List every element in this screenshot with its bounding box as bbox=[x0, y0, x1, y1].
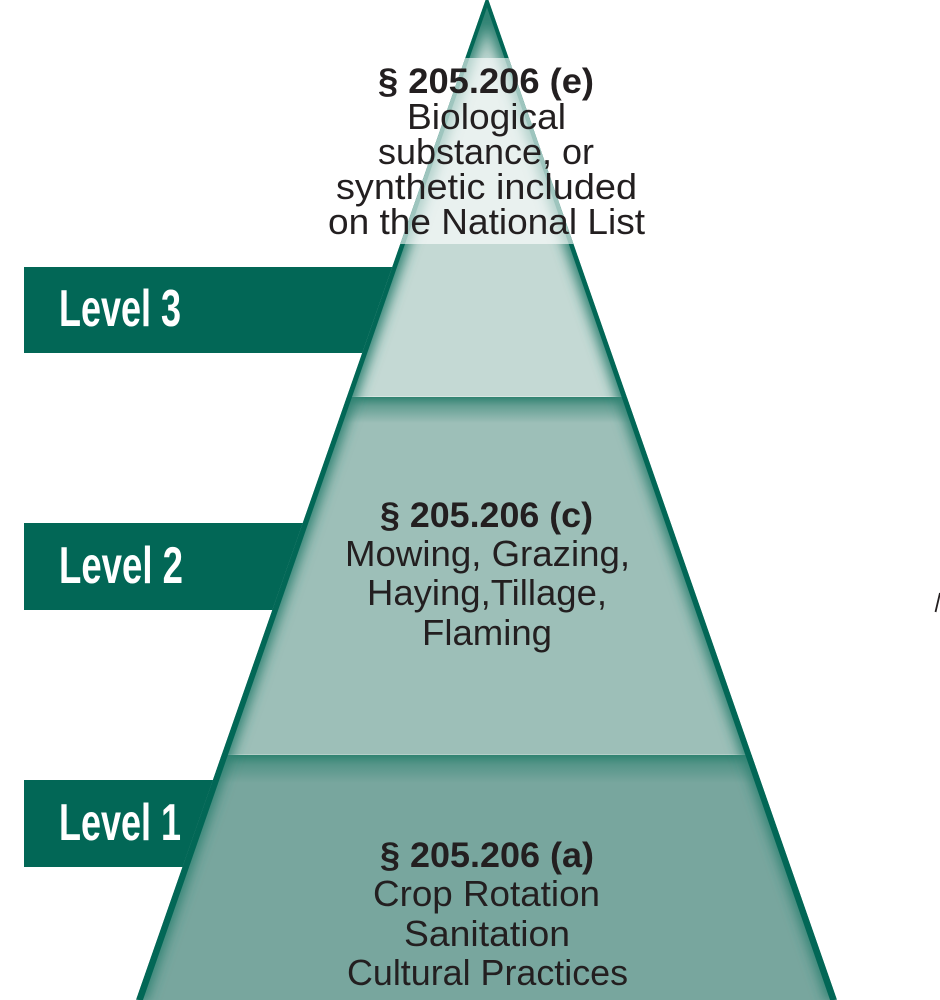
text: level 1 regulation bbox=[347, 836, 628, 993]
cropped slash mark at right edge bbox=[936, 593, 940, 612]
level 1 tab bbox=[24, 780, 222, 867]
text: level 3 regulation: synthetic included bbox=[336, 166, 637, 207]
pyramid bbox=[130, 0, 850, 1000]
text: level 3 regulation: substance, or bbox=[378, 131, 594, 172]
text: level 3 regulation: Biological bbox=[407, 96, 566, 137]
level 3 tab bbox=[24, 267, 400, 353]
level 2 tab bbox=[24, 523, 310, 610]
text: level 1 regulation: Cultural Practices bbox=[347, 952, 628, 993]
pyramid tier: level 1 bbox=[130, 755, 850, 1000]
text: level 3 regulation bbox=[328, 62, 645, 242]
label: Level 1: Level 1 bbox=[59, 794, 181, 852]
label: Level 3: Level 3 bbox=[59, 280, 181, 338]
text: level 3 regulation: § 205.206 (e) bbox=[378, 62, 594, 101]
text: level 2 regulation: Flaming bbox=[422, 612, 552, 653]
pyramid tier: level 3 bbox=[348, 28, 626, 396]
text: level 1 regulation: § 205.206 (a) bbox=[380, 836, 594, 875]
text: level 3 regulation: on the National List bbox=[328, 201, 645, 242]
text: level 2 regulation: Haying,Tillage, bbox=[367, 572, 607, 613]
text: level 2 regulation bbox=[345, 496, 630, 653]
text: level 1 regulation: Sanitation bbox=[404, 913, 570, 954]
text: level 2 regulation: Mowing, Grazing, bbox=[345, 533, 630, 574]
text: level 1 regulation: Crop Rotation bbox=[373, 873, 600, 914]
text: level 2 regulation: § 205.206 (c) bbox=[380, 496, 593, 535]
label: Level 2: Level 2 bbox=[59, 537, 183, 595]
pyramid tier: level 2 bbox=[222, 398, 752, 754]
